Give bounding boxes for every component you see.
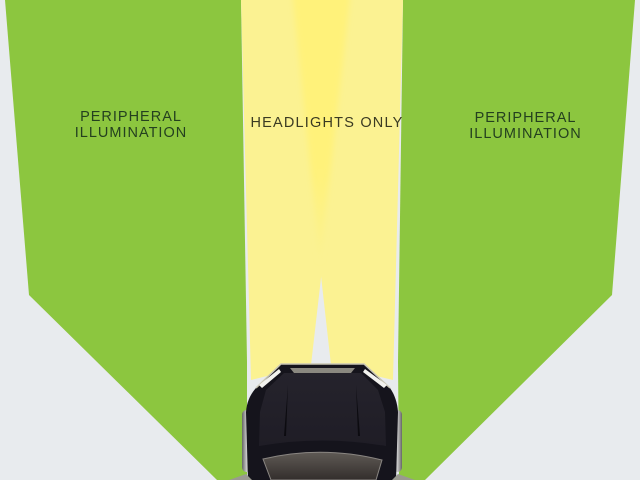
overlapping bright beam	[292, 0, 351, 262]
left mirror	[242, 410, 251, 472]
left door mirror base	[229, 474, 252, 480]
right peripheral illumination area	[398, 0, 635, 480]
left label: peripheral illumination: PERIPHERAL	[80, 109, 182, 125]
left label: peripheral illumination	[75, 109, 187, 141]
windshield	[263, 452, 382, 480]
center label: headlights only: HEADLIGHTS ONLY	[250, 115, 404, 131]
left peripheral illumination area	[5, 0, 247, 480]
right label: peripheral illumination: ILLUMINATION	[469, 126, 582, 142]
right label: peripheral illumination: PERIPHERAL	[475, 110, 576, 126]
right label: peripheral illumination	[469, 110, 582, 142]
left label: peripheral illumination: ILLUMINATION	[75, 125, 187, 141]
right headlight beam	[290, 0, 403, 380]
top trim	[256, 364, 390, 388]
car body	[246, 364, 398, 480]
left headlight	[259, 369, 281, 388]
left headlight beam	[241, 0, 353, 380]
grille bar	[290, 368, 355, 373]
right mirror	[393, 410, 402, 472]
car seen from the front	[229, 364, 415, 480]
right door mirror base	[392, 474, 415, 480]
hood	[259, 373, 386, 446]
right headlight	[363, 369, 387, 388]
hood creases	[284, 385, 360, 436]
